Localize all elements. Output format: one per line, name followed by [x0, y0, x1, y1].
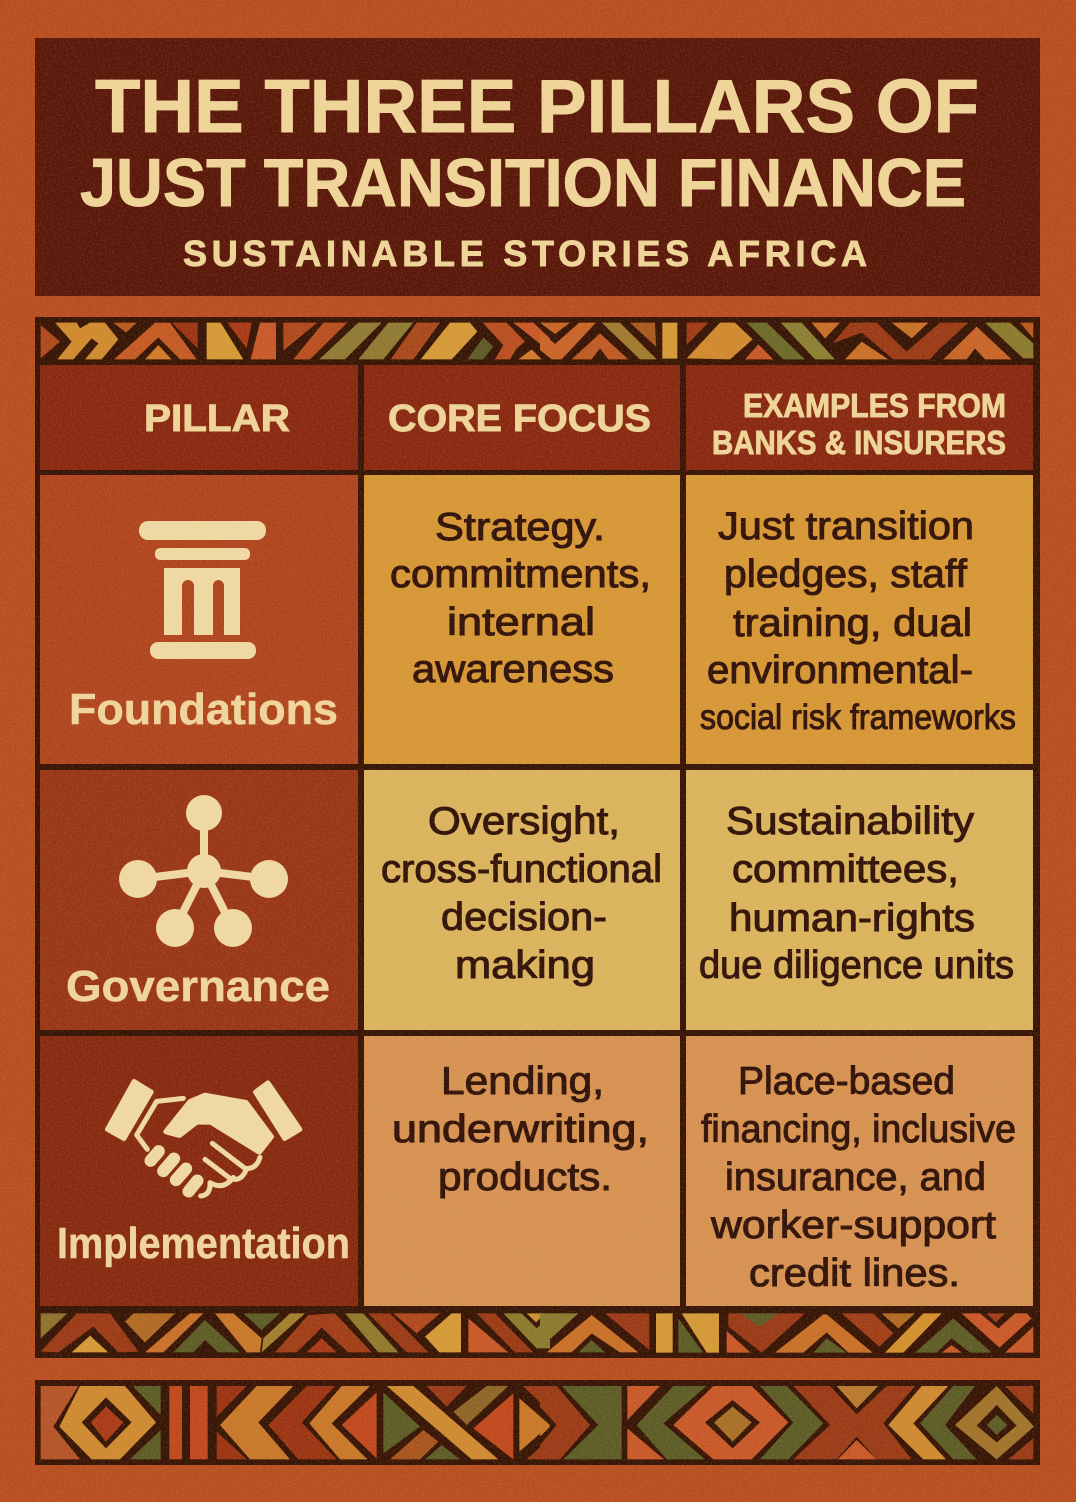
- header cell: core focus: CORE FOCUS: [388, 398, 651, 440]
- examples: governance: [686, 770, 1033, 1030]
- header cell: core focus: [364, 365, 680, 470]
- title panel: [35, 38, 1040, 296]
- examples: governance: due diligence units: [699, 944, 1014, 987]
- icon: network nodes: [119, 795, 288, 947]
- examples: governance: Sustainability: [726, 800, 975, 843]
- core focus: foundations: awareness: [412, 648, 614, 691]
- examples: implementation: insurance, and: [725, 1156, 986, 1199]
- title line 1: THE THREE PILLARS OF: [95, 64, 979, 148]
- core focus: implementation: products.: [438, 1156, 612, 1199]
- examples: foundations: [686, 475, 1033, 764]
- examples: governance: human-rights: [729, 897, 975, 940]
- examples: governance: committees,: [732, 848, 959, 891]
- examples: implementation: financing, inclusive: [701, 1108, 1016, 1151]
- title line 2: JUST TRANSITION FINANCE: [80, 145, 966, 221]
- examples: foundations: environmental-: [707, 649, 973, 692]
- icon: pillar column: [139, 521, 266, 659]
- examples: foundations: training, dual: [733, 602, 972, 645]
- core focus: foundations: [364, 475, 680, 764]
- core focus: foundations: commitments,: [390, 553, 651, 596]
- core focus: governance: making: [455, 944, 595, 987]
- header cell: pillar: PILLAR: [144, 398, 290, 440]
- core focus: implementation: [364, 1036, 680, 1306]
- core focus: foundations: Strategy.: [435, 506, 605, 549]
- pillar cell: implementation: [40, 1036, 358, 1306]
- header cell: pillar: [40, 365, 358, 470]
- examples: implementation: [686, 1036, 1033, 1306]
- lower pattern band: [41, 1313, 1033, 1353]
- top pattern band: [41, 323, 1033, 359]
- core focus: foundations: internal: [447, 601, 595, 644]
- pillar cell: foundations: [40, 475, 358, 764]
- examples: foundations: social risk frameworks: [700, 698, 1016, 737]
- table frame with patterned bands: [35, 317, 1040, 1358]
- icon: handshake: [107, 1081, 300, 1196]
- header cell: examples: BANKS & INSURERS: [712, 424, 1006, 461]
- examples: foundations: Just transition: [718, 505, 974, 548]
- subtitle: SUSTAINABLE STORIES AFRICA: [183, 233, 867, 274]
- core focus: implementation: Lending,: [441, 1060, 604, 1103]
- examples: implementation: credit lines.: [749, 1252, 960, 1295]
- core focus: governance: Oversight,: [428, 800, 620, 843]
- core focus: governance: [364, 770, 680, 1030]
- examples: foundations: pledges, staff: [724, 553, 967, 596]
- core focus: implementation: underwriting,: [392, 1108, 649, 1151]
- header cell: examples: [686, 365, 1033, 470]
- examples: implementation: Place-based: [738, 1060, 955, 1103]
- header cell: examples: EXAMPLES FROM: [743, 387, 1006, 424]
- core focus: governance: cross-functional: [381, 848, 662, 891]
- label: implementation: Implementation: [57, 1219, 350, 1268]
- pillar cell: governance: [40, 770, 358, 1030]
- label: foundations: Foundations: [69, 685, 338, 734]
- bottom decorative pattern strip: [35, 1380, 1040, 1465]
- core focus: governance: decision-: [441, 896, 607, 939]
- label: governance: Governance: [66, 962, 330, 1011]
- examples: implementation: worker-support: [710, 1204, 996, 1247]
